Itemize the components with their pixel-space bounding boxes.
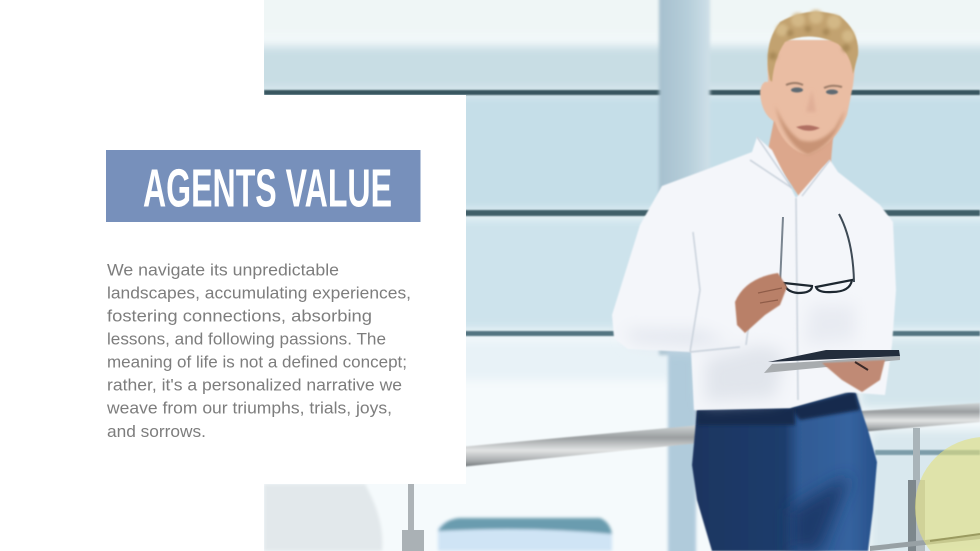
parked car [438,518,612,551]
window pillar [659,0,710,551]
holding hand lower [822,360,885,392]
shirt [612,137,896,410]
white left strip [0,0,264,551]
neck [768,120,834,196]
body paragraph: rather, it's a personalized narrative we [107,376,402,394]
holding hand [735,273,787,333]
eyes, nose, mouth [786,83,842,131]
head and face [760,40,854,155]
body paragraph: and sorrows. [107,422,206,441]
body paragraph: lessons, and following passions. The [107,330,386,348]
handrail and posts [402,403,980,551]
white text panel [0,95,466,484]
body paragraph: meaning of life is not a defined concept; [107,352,407,372]
body paragraph: fostering connections, absorbing [107,306,372,326]
background photo: office window scene [254,0,980,551]
trousers [692,391,877,551]
curly hair [768,10,858,82]
grey blurred object lower left [264,484,382,551]
title: AGENTS VALUE [143,158,392,218]
tablet [764,356,900,373]
glasses [780,214,854,293]
body paragraph: landscapes, accumulating experiences, [107,284,411,302]
man holding glasses and tablet [612,10,900,551]
body paragraph [106,260,411,441]
yellow translucent circle [915,437,980,551]
shirt shading [625,305,855,402]
body paragraph: We navigate its unpredictable [107,260,339,280]
heading banner [106,150,420,222]
body paragraph: weave from our triumphs, trials, joys, [106,398,392,418]
